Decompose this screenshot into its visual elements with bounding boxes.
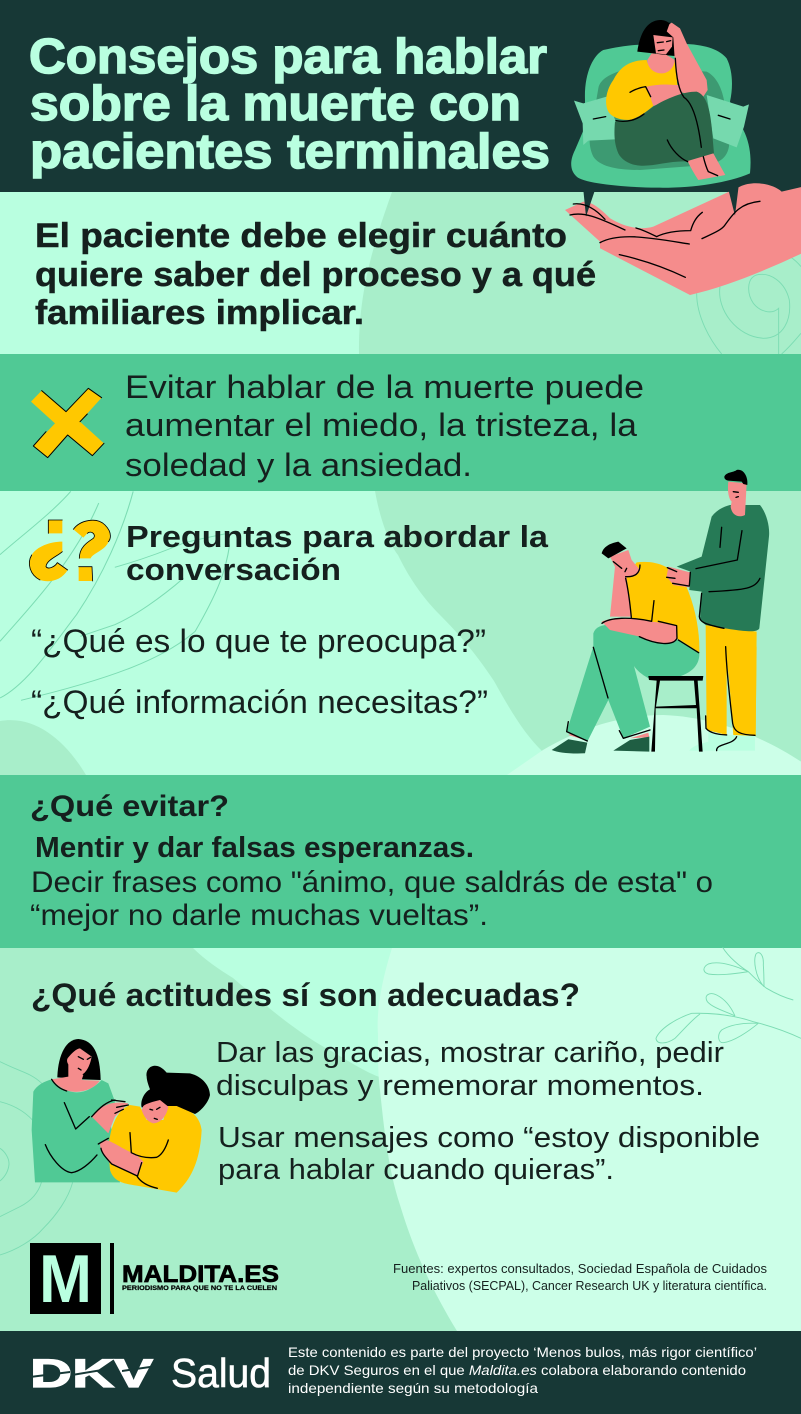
warning text: Evitar hablar de la muerte puede [125,369,644,405]
avoid examples [30,866,713,932]
title: Consejos para hablar [29,30,547,84]
panel: questions [0,470,801,775]
logo: Maldita.es [30,1241,279,1317]
lead statement: familiares implicar. [35,294,364,332]
lead statement: El paciente debe elegir cuánto [35,217,567,255]
sources [393,1261,767,1293]
illustration: woman on armchair held by a hand [565,20,801,295]
illustration: two women embracing [32,1039,210,1193]
questions heading: conversación [126,552,341,587]
logo: DKV Salud [30,1350,271,1396]
avoid examples: “mejor no darle muchas vueltas”. [30,899,488,932]
attitudes text: para hablar cuando quieras”. [218,1154,614,1186]
lead statement: quiere saber del proceso y a qué [35,256,596,294]
sample questions: “¿Qué información necesitas?” [31,684,488,720]
title: sobre la muerte con [30,77,521,131]
logo: DKV Salud: Salud [171,1350,271,1396]
logo: Maldita.es: PERIODISMO PARA QUE NO TE LA CUELEN [122,1285,277,1292]
illustration: man comforting seated man [507,470,801,775]
icon: yellow cross [31,388,104,458]
attitudes text: disculpas y rememorar momentos. [216,1070,704,1102]
panel: warning band [0,354,801,491]
questions heading [126,519,549,587]
warning text: soledad y la ansiedad. [125,447,472,483]
panel: what to avoid [0,775,801,948]
title: pacientes terminales [30,125,550,179]
sponsor note: de DKV Seguros en el que Maldita.es colabora elaborando contenido [288,1362,746,1378]
warning text: aumentar el miedo, la tristeza, la [125,407,637,443]
attitudes text: Dar las gracias, mostrar cariño, pedir [216,1037,724,1069]
sample questions: “¿Qué es lo que te preocupa?” [31,623,486,659]
panel: patient chooses [0,192,801,354]
title [29,30,550,179]
panel: appropriate attitudes [0,947,801,1331]
sample questions [31,623,488,720]
avoid heading: ¿Qué evitar? [30,790,229,823]
panel: sponsor footer [0,1331,801,1414]
sponsor note [288,1344,757,1396]
sources: Paliativos (SECPAL), Cancer Research UK y literatura científica. [412,1278,767,1293]
panel: header [0,0,801,192]
attitudes text: Usar mensajes como “estoy disponible [218,1122,760,1154]
logo: Maldita.es: MALDITA.ES [122,1261,279,1288]
lead statement [35,217,596,332]
sponsor note: independiente según su metodología [288,1380,538,1396]
attitudes text [216,1037,760,1186]
sponsor note: Este contenido es parte del proyecto ‘Menos bulos, más rigor científico’ [288,1344,757,1360]
warning text [125,369,644,483]
questions heading: Preguntas para abordar la [126,519,549,554]
attitudes heading: ¿Qué actitudes sí son adecuadas? [31,977,580,1013]
sources: Fuentes: expertos consultados, Sociedad Española de Cuidados [393,1261,767,1276]
icon: question marks [29,520,110,581]
avoid examples: Decir frases como "ánimo, que saldrás de esta" o [31,866,713,899]
logo: DKV Salud: DKV [30,1352,153,1396]
logo: Maldita.es: M [39,1241,92,1317]
avoid statement: Mentir y dar falsas esperanzas. [35,832,474,864]
